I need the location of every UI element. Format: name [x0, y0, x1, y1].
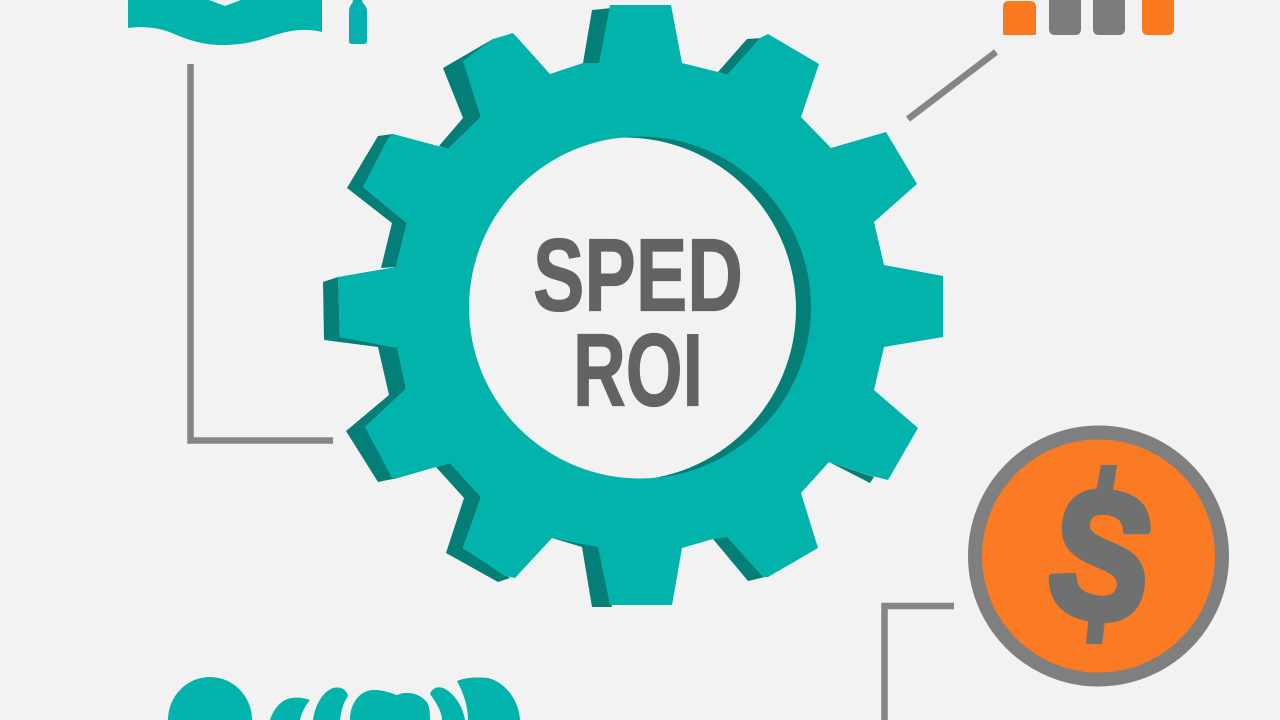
icon: bar chart — [1003, 0, 1174, 35]
gear centre hole — [469, 136, 811, 478]
gear — [323, 5, 943, 607]
icon: graduation cap — [128, 0, 367, 45]
gear front face — [338, 5, 943, 605]
icon: dollar coin: S — [1037, 449, 1166, 661]
connector: coin to gear — [884, 606, 954, 720]
title: SPED ROI: ROI — [573, 312, 703, 428]
connector: bars to gear — [908, 52, 996, 119]
connector: cap to gear — [190, 64, 333, 440]
title: SPED ROI — [533, 218, 743, 428]
icon: group of people — [168, 677, 520, 720]
title: SPED ROI: SPED — [533, 218, 743, 332]
gear side shadow — [323, 8, 874, 607]
icon: dollar coin — [975, 432, 1222, 680]
